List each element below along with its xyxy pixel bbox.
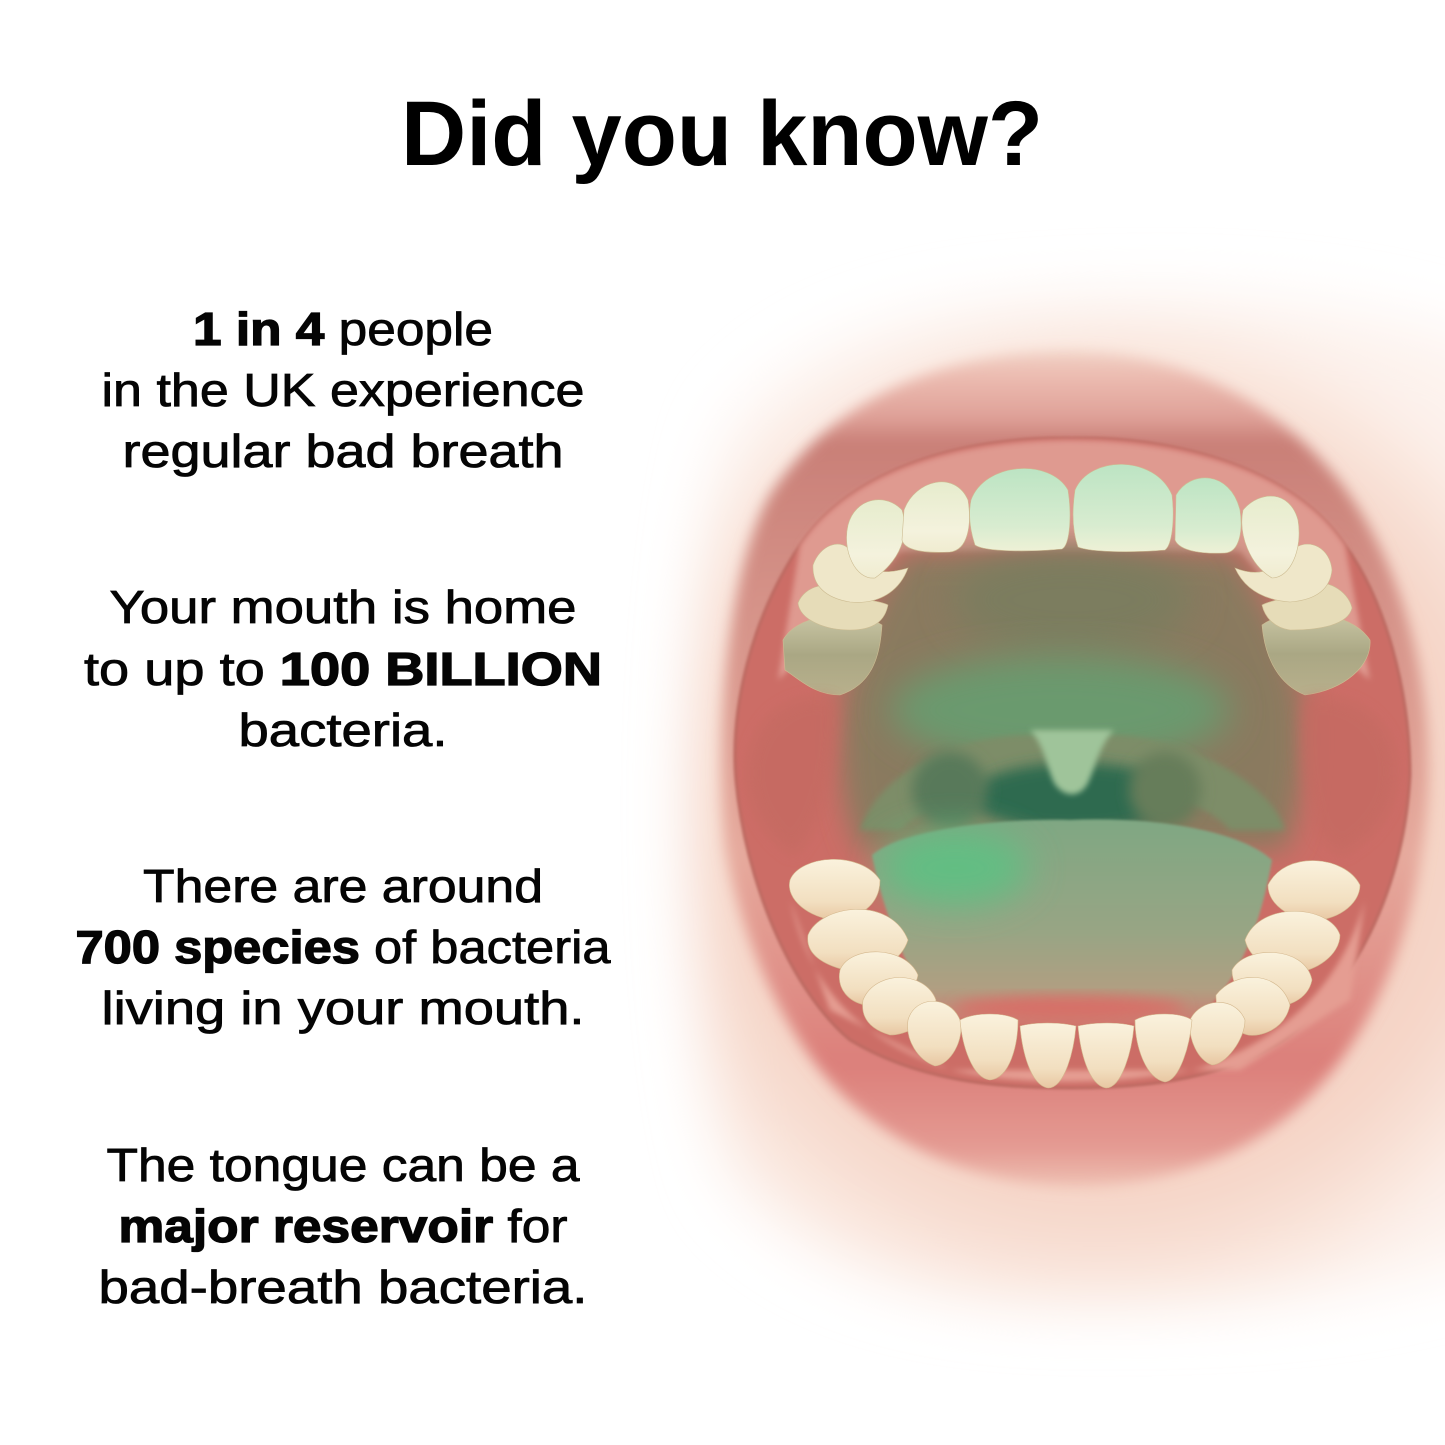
upper teeth: [783, 464, 1370, 695]
inner cheek shading: [748, 698, 1395, 855]
text block: 1 in 4 people: 1 in 4 people: [193, 303, 493, 355]
lips: [722, 352, 1428, 1186]
text block: 100 billion bacteria: to up to 100 BILLION: [84, 643, 602, 695]
palate and throat: [840, 550, 1304, 850]
lower gum: [790, 900, 1365, 1082]
tongue: [872, 819, 1272, 1025]
text block: tongue reservoir: major reservoir for: [118, 1200, 568, 1252]
text block: 700 species: living in your mouth.: [102, 982, 584, 1034]
text block: 1 in 4 people: regular bad breath: [122, 425, 564, 477]
text block: 1 in 4 people: in the UK experience: [102, 364, 584, 416]
title: Did you know?: [401, 83, 1043, 185]
text block: 700 species: There are around: [143, 860, 543, 912]
skin around mouth: [692, 298, 1445, 1305]
text block: tongue reservoir: [98, 1139, 588, 1313]
text block: 700 species: 700 species of bacteria: [76, 921, 611, 973]
text block: tongue reservoir: The tongue can be a: [106, 1139, 580, 1191]
text block: tongue reservoir: bad-breath bacteria.: [98, 1261, 588, 1313]
photo: open mouth with green glow: [692, 298, 1445, 1305]
text block: 100 billion bacteria: [84, 581, 602, 756]
mouth cavity: [735, 438, 1410, 1088]
upper gum: [778, 440, 1370, 680]
lower teeth: [789, 859, 1360, 1088]
text block: 100 billion bacteria: Your mouth is home: [110, 581, 576, 633]
text block: 100 billion bacteria: bacteria.: [238, 704, 448, 756]
text block: 1 in 4 people: [102, 303, 584, 477]
text block: 700 species: [76, 860, 611, 1034]
uvula: [1030, 730, 1114, 794]
